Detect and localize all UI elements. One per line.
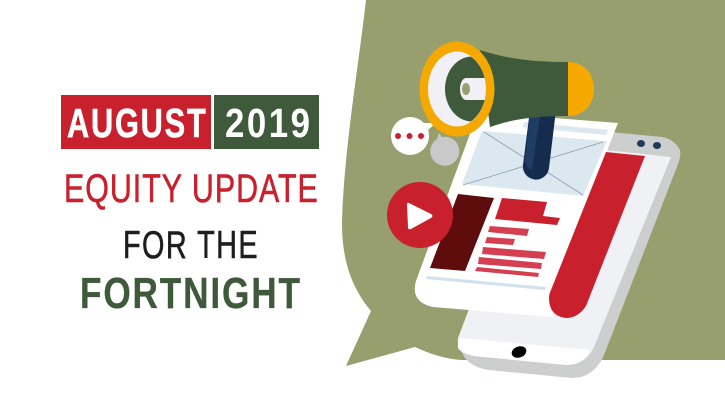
headline block — [495, 198, 560, 225]
badge: August: AUGUST — [67, 100, 206, 146]
inner tube opening — [462, 83, 470, 95]
handle shade — [525, 116, 540, 170]
illustration: paper — [415, 112, 645, 318]
speech bubble background — [342, 0, 725, 366]
red scroll bar — [549, 152, 645, 318]
badge: 2019: 2019 — [225, 101, 310, 147]
title block — [61, 95, 319, 318]
icon: play button — [387, 182, 453, 248]
illustration: phone — [458, 132, 680, 378]
handle — [523, 110, 556, 180]
envelope — [462, 131, 607, 196]
mouth interior — [445, 56, 486, 122]
icon: chat bubble — [391, 117, 436, 155]
orange rim — [420, 42, 494, 136]
footer line — [426, 276, 546, 290]
phone bottom strip — [458, 338, 590, 365]
top strip — [522, 122, 608, 135]
inner mouth — [428, 52, 486, 126]
horn — [480, 50, 568, 127]
phone body — [458, 132, 680, 378]
icon: megaphone — [420, 42, 594, 180]
icon: grey bubble — [430, 133, 459, 166]
text lines — [475, 226, 546, 277]
phone screen — [458, 150, 671, 365]
image block — [430, 194, 494, 271]
camera dots — [637, 140, 661, 149]
badge: 2019 — [214, 95, 319, 149]
end cap — [568, 62, 594, 116]
heading: fortnight: FORTNIGHT — [80, 269, 300, 318]
paper sheet — [415, 112, 618, 317]
home button — [510, 344, 528, 360]
heading: for the: FOR THE — [123, 224, 258, 267]
heading: equity update: EQUITY UPDATE — [64, 166, 318, 211]
